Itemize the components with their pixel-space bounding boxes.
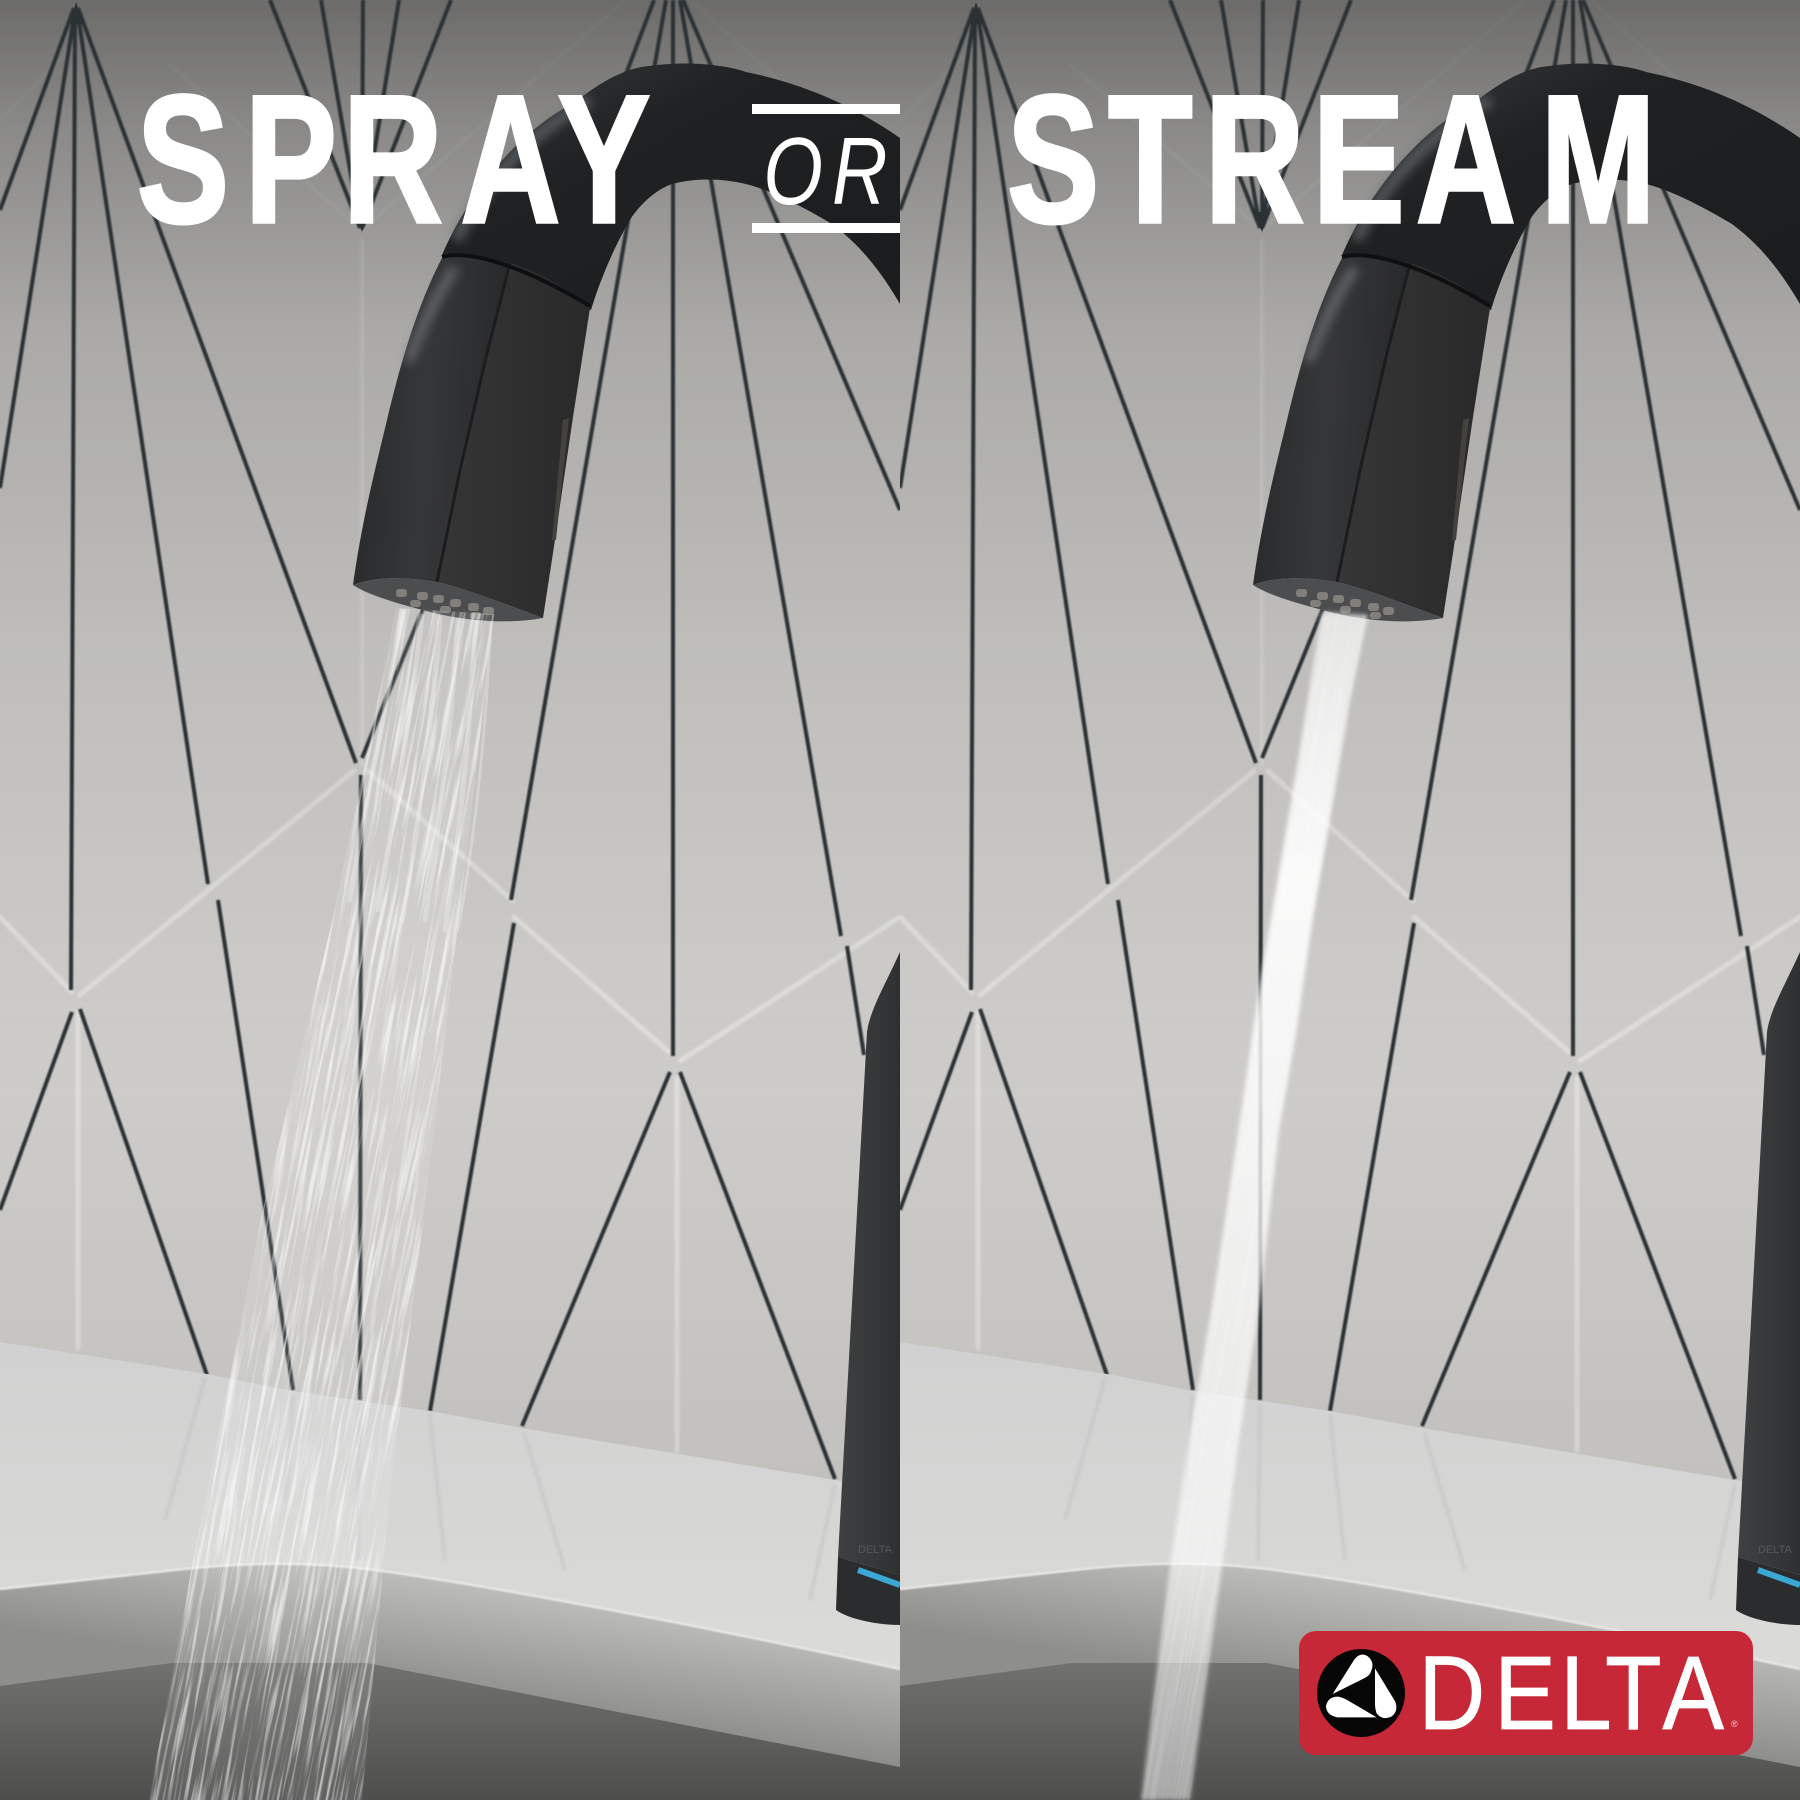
icon: Delta triangle mark — [1317, 1649, 1405, 1737]
title: SPRAY: SPRAY — [137, 59, 650, 261]
connector: OR with rules: OR — [763, 118, 887, 225]
logo: Delta: ® — [1731, 1719, 1738, 1729]
panel: spray — [0, 0, 900, 1800]
stream water — [1138, 610, 1370, 1800]
logo: Delta — [1299, 1631, 1753, 1755]
connector: OR with rules — [752, 104, 900, 233]
title: STREAM: STREAM — [1007, 59, 1656, 261]
logo: Delta: DELTA — [1419, 1633, 1724, 1751]
stream photo: wall, counter and faucet — [900, 0, 1800, 1800]
base lettering: stream panel: DELTA — [1758, 1544, 1792, 1556]
base lettering: spray panel: DELTA — [858, 1544, 892, 1556]
panel: stream — [900, 0, 1800, 1800]
spray photo: wall, counter and faucet — [0, 0, 900, 1800]
spray water — [149, 608, 494, 1800]
